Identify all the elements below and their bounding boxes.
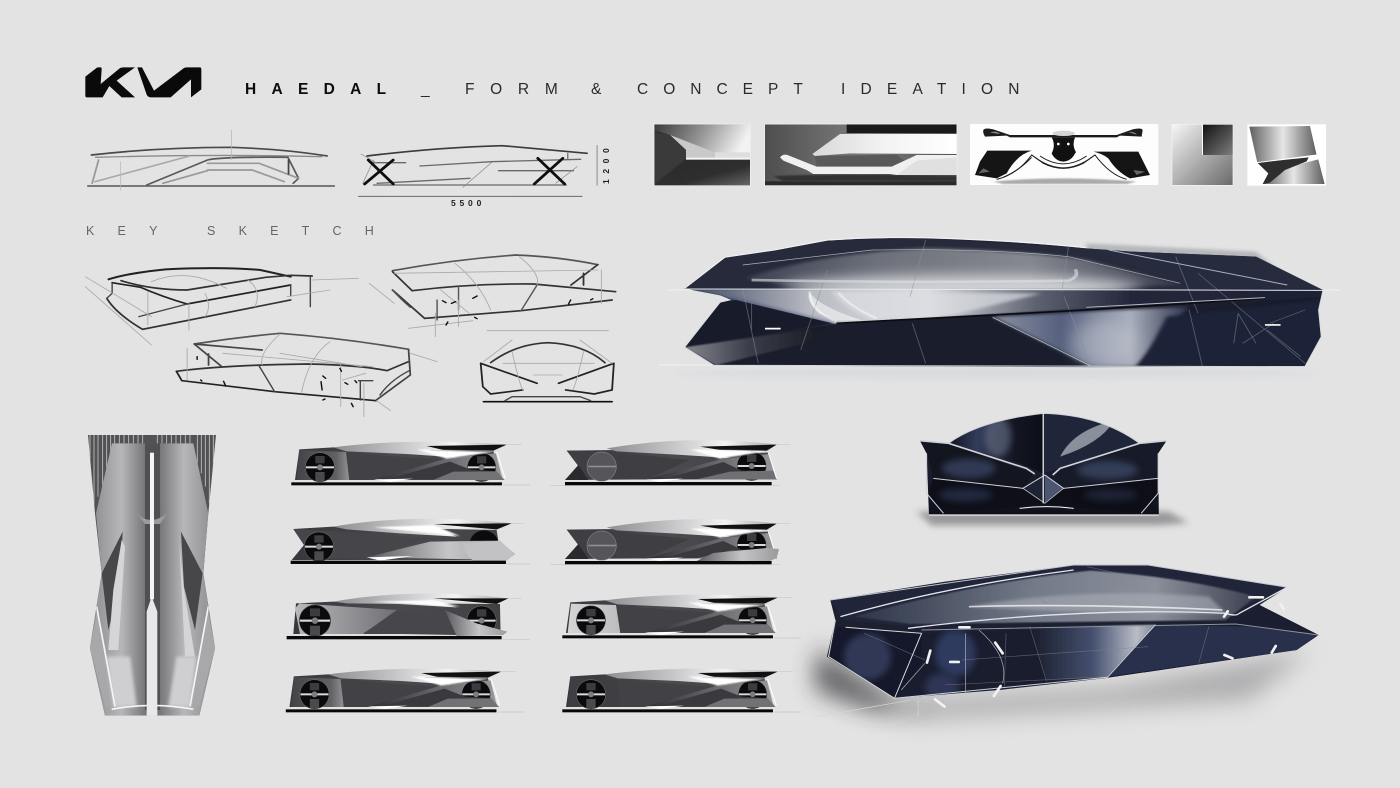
variation: row one left (291, 442, 530, 485)
header: logo and title (85, 67, 1035, 98)
variation: row three left (287, 594, 530, 639)
light markers (927, 597, 1284, 707)
title text (245, 81, 1035, 98)
car body (918, 412, 1168, 516)
title text: CONCEPT (637, 81, 818, 98)
variation: row one right (550, 440, 791, 485)
variation: row four left (286, 669, 524, 712)
sketch: three quarter front right (176, 333, 437, 417)
thumbnail: gradient corner (1172, 124, 1233, 186)
title text: _ (420, 81, 430, 98)
highlight lines (817, 565, 1319, 717)
highlight lines (920, 413, 1167, 515)
sketch: front view (481, 331, 614, 402)
ground shadow (916, 512, 1189, 525)
sketch: three quarter rear right (369, 255, 616, 337)
top stripes (90, 435, 214, 506)
title text: FORM (465, 81, 573, 98)
soft ground smudge (676, 369, 1319, 378)
dimension label: height: 1200 (601, 143, 611, 184)
proportion sketches with dimensions (88, 130, 597, 196)
side sketch one (88, 130, 334, 190)
side sketch two with wheel crosses (361, 146, 587, 187)
variation: row three right (562, 595, 801, 638)
thumbnail: white sculpture form (970, 124, 1158, 185)
variation: row two left (291, 519, 530, 564)
sketch: three quarter front left (85, 268, 359, 345)
heading: key sketch: KEY SKETCH (86, 224, 397, 238)
small side view variations (286, 440, 801, 712)
icon: KIA logo (85, 67, 201, 97)
title text: IDEATION (841, 81, 1035, 98)
top view rendering (87, 434, 217, 717)
dimension lines (359, 145, 597, 196)
three quarter view rendering (817, 563, 1324, 720)
title text: HAEDAL (245, 81, 401, 98)
reference thumbnails (654, 124, 1326, 186)
dimension label: length: 5500 (451, 198, 485, 208)
thumbnail: dark surface fold (654, 124, 751, 186)
variation: row four right (562, 669, 801, 712)
thumbnail: light signature detail (764, 124, 957, 186)
car body (680, 237, 1327, 370)
key sketches (85, 255, 616, 417)
variation: row two right (550, 519, 791, 564)
car body (824, 563, 1324, 700)
main side view rendering (658, 237, 1340, 378)
title text: & (591, 81, 602, 98)
front view rendering (916, 412, 1189, 525)
thumbnail: twisted cylinder (1247, 124, 1326, 186)
highlight lines (685, 237, 1323, 367)
cast shadow (817, 640, 1310, 720)
